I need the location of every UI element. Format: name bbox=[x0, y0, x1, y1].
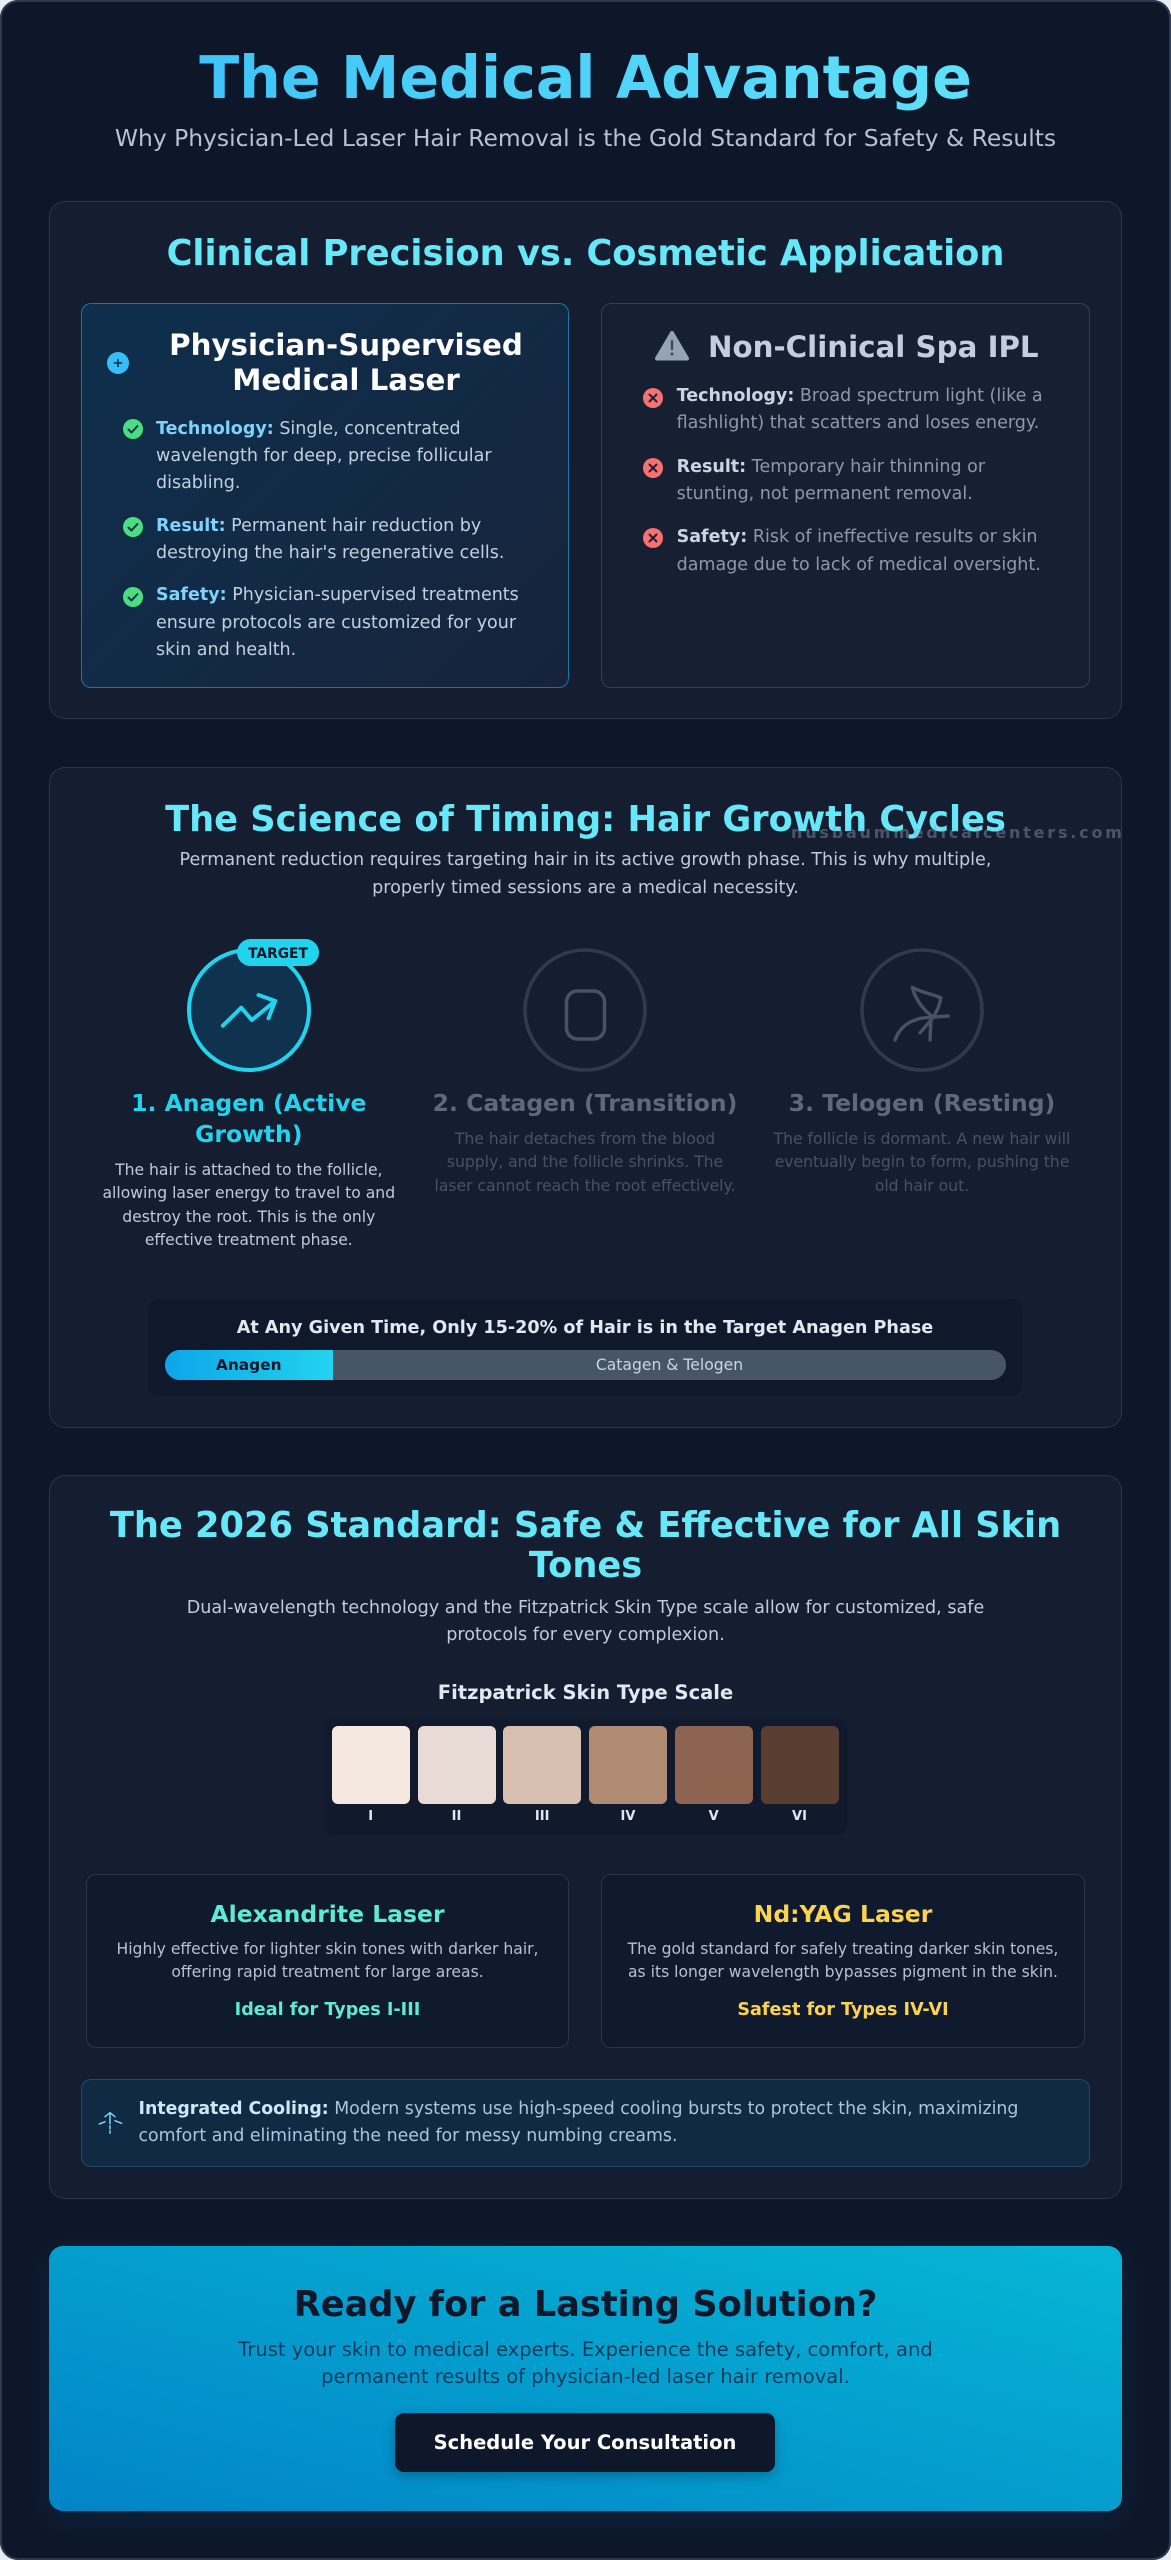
text: technology: Technology: Single, concentrated bbox=[156, 418, 461, 438]
nd:yag description: as its longer wavelength bypasses pigment in the skin. bbox=[628, 1963, 1058, 1981]
card: nd:yag laser bbox=[601, 1874, 1085, 2048]
text: safety bbox=[677, 527, 1041, 574]
icon: check result bbox=[123, 517, 143, 537]
intro text: Permanent reduction requires targeting hair in its active growth phase. This is why multiple, bbox=[180, 850, 991, 870]
subtitle: Why Physician-Led Laser Hair Removal is the Gold Standard for Safety & Results bbox=[115, 124, 1056, 152]
fitzpatrick scale swatches: III bbox=[535, 1809, 549, 1824]
text: technology bbox=[156, 418, 492, 493]
icon: cross safety bbox=[643, 528, 663, 548]
watermark: nusbaummedicalcenters.com bbox=[791, 823, 1125, 842]
heading: physician-supervised: Medical Laser bbox=[232, 363, 460, 397]
intro text: protocols for every complexion. bbox=[446, 1625, 725, 1645]
text: anagen description: The hair is attached to the follicle, bbox=[115, 1161, 382, 1179]
fitzpatrick scale swatches: I bbox=[368, 1809, 373, 1824]
alexandrite description: Highly effective for lighter skin tones with darker hair, bbox=[116, 1940, 539, 1958]
heading: clinical precision: Clinical Precision vs. Cosmetic Application bbox=[167, 232, 1004, 274]
fitzpatrick scale swatches: VI bbox=[792, 1809, 807, 1824]
fitzpatrick scale swatches bbox=[323, 1718, 847, 1835]
text: anagen description: allowing laser energy to travel to and bbox=[102, 1184, 395, 1202]
text: catagen title: 2. Catagen (Transition) bbox=[433, 1088, 737, 1116]
stat title: At Any Given Time, Only 15-20% of Hair is in the Target Anagen Phase bbox=[237, 1318, 933, 1338]
heading: fitzpatrick scale: Fitzpatrick Skin Type Scale bbox=[438, 1681, 733, 1704]
text: telogen description: old hair out. bbox=[875, 1177, 969, 1195]
text: cta: permanent results of physician-led laser hair removal. bbox=[321, 2365, 850, 2388]
target badge: TARGET bbox=[248, 946, 308, 962]
icon: catagen circle bbox=[523, 948, 647, 1072]
text: telogen description: The follicle is dormant. A new hair will bbox=[774, 1130, 1070, 1148]
text: integrated cooling: comfort and eliminating the need for messy numbing creams. bbox=[138, 2126, 677, 2146]
target badge bbox=[237, 939, 319, 966]
alexandrite description: offering rapid treatment for large areas. bbox=[171, 1963, 484, 1981]
callout: integrated cooling bbox=[81, 2079, 1090, 2167]
button: schedule bbox=[395, 2413, 775, 2472]
heading: 2026 standard bbox=[110, 1505, 1061, 1586]
nd:yag title: Nd:YAG Laser bbox=[754, 1900, 932, 1928]
text: technology bbox=[676, 386, 1043, 433]
icon: anagen circle bbox=[187, 949, 311, 1072]
stat bar box bbox=[148, 1299, 1022, 1396]
icon: check safety bbox=[123, 587, 143, 607]
text: telogen title: 3. Telogen (Resting) bbox=[789, 1088, 1055, 1116]
heading: non-clinical spa ipl: Non-Clinical Spa IPL bbox=[708, 330, 1039, 364]
icon: cooling bbox=[98, 2112, 122, 2134]
call to action panel bbox=[49, 2246, 1122, 2511]
text: anagen description: effective treatment phase. bbox=[145, 1231, 353, 1249]
text: anagen description bbox=[102, 1161, 395, 1249]
text: telogen description: eventually begin to form, pushing the bbox=[775, 1153, 1069, 1171]
alexandrite ideal types: Ideal for Types I-III bbox=[235, 2000, 420, 2020]
text: anagen title bbox=[131, 1088, 366, 1148]
heading: ready for a lasting solution: Ready for a Lasting Solution? bbox=[294, 2284, 877, 2324]
text: cta bbox=[238, 2338, 933, 2388]
text: safety: ensure protocols are customized for your bbox=[156, 613, 516, 633]
text: safety: Safety: Risk of ineffective results or skin bbox=[677, 527, 1038, 547]
text: telogen description bbox=[774, 1130, 1070, 1195]
heading: 2026 standard: The 2026 Standard: Safe & Effective for All Skin bbox=[110, 1505, 1061, 1546]
text: integrated cooling: Integrated Cooling: Modern systems use high-speed cooling bursts to protect the skin, maximizing bbox=[138, 2098, 1018, 2118]
heading: physician-supervised bbox=[169, 328, 523, 397]
fitzpatrick scale swatches: II bbox=[452, 1809, 461, 1824]
intro text: Dual-wavelength technology and the Fitzpatrick Skin Type scale allow for customized, safe bbox=[187, 1598, 984, 1618]
text: technology: wavelength for deep, precise follicular bbox=[156, 446, 492, 466]
text: safety bbox=[156, 585, 519, 660]
bar segment: catagen and telogen: Catagen & Telogen bbox=[596, 1356, 743, 1374]
text: safety: damage due to lack of medical oversight. bbox=[677, 554, 1041, 574]
heading: science of timing: The Science of Timing: Hair Growth Cycles bbox=[165, 798, 1006, 840]
text: catagen description: The hair detaches from the blood bbox=[455, 1130, 715, 1148]
text: anagen description: destroy the root. This is the only bbox=[122, 1208, 375, 1226]
bar segment: anagen: Anagen bbox=[216, 1356, 282, 1374]
icon: warning bbox=[655, 330, 690, 360]
heading: physician-supervised: Physician-Supervised bbox=[169, 328, 523, 362]
text: result: Result: Permanent hair reduction by bbox=[156, 516, 481, 536]
text: anagen title: Growth) bbox=[195, 1120, 303, 1148]
fitzpatrick scale swatches: IV bbox=[621, 1809, 635, 1824]
intro text bbox=[187, 1598, 984, 1645]
icon: cross technology bbox=[643, 388, 663, 408]
text: result: destroying the hair's regenerative cells. bbox=[156, 543, 504, 563]
text: result: stunting, not permanent removal. bbox=[677, 484, 973, 504]
text: catagen description: supply, and the follicle shrinks. The bbox=[447, 1153, 723, 1171]
text: safety: Safety: Physician-supervised treatments bbox=[156, 585, 519, 605]
text: technology: disabling. bbox=[156, 473, 240, 493]
nd:yag description: The gold standard for safely treating darker skin tones, bbox=[628, 1940, 1058, 1958]
alexandrite description bbox=[116, 1940, 539, 1981]
text: technology: flashlight) that scatters and loses energy. bbox=[677, 413, 1039, 433]
alexandrite title: Alexandrite Laser bbox=[210, 1900, 445, 1928]
title: The Medical Advantage bbox=[199, 44, 972, 112]
panel: clinical precision vs cosmetic application bbox=[49, 201, 1122, 719]
heading: 2026 standard: Tones bbox=[529, 1545, 642, 1586]
text: result: Result: Temporary hair thinning or bbox=[677, 457, 985, 477]
text: anagen title: 1. Anagen (Active bbox=[131, 1088, 366, 1116]
panel: science of timing bbox=[49, 767, 1122, 1428]
nd:yag safest types: Safest for Types IV-VI bbox=[737, 2000, 949, 2020]
text: catagen description bbox=[435, 1130, 735, 1195]
text: integrated cooling bbox=[138, 2098, 1018, 2146]
nd:yag description bbox=[628, 1940, 1058, 1981]
progress bar bbox=[164, 1350, 1006, 1380]
intro text: properly timed sessions are a medical necessity. bbox=[372, 878, 799, 898]
card: physician-supervised medical laser bbox=[81, 303, 569, 688]
text: technology: Technology: Broad spectrum light (like a bbox=[677, 386, 1043, 406]
text: cta: Trust your skin to medical experts. Experience the safety, comfort, and bbox=[238, 2338, 933, 2361]
bar segment: anagen bbox=[164, 1350, 333, 1380]
text: catagen description: laser cannot reach the root effectively. bbox=[435, 1177, 735, 1195]
panel: 2026 standard bbox=[49, 1475, 1122, 2199]
intro text bbox=[180, 850, 991, 898]
icon: telogen circle bbox=[860, 948, 984, 1072]
title bbox=[0, 41, 1171, 115]
icon: cross result bbox=[643, 458, 663, 478]
card: alexandrite laser bbox=[86, 1874, 569, 2048]
fitzpatrick scale swatches: V bbox=[709, 1809, 719, 1824]
button: schedule: Schedule Your Consultation bbox=[434, 2431, 736, 2454]
card: non-clinical spa ipl bbox=[601, 303, 1090, 688]
text: result bbox=[156, 516, 504, 563]
icon: check technology bbox=[123, 419, 143, 439]
icon: plus bbox=[107, 352, 129, 374]
text: safety: skin and health. bbox=[156, 640, 296, 660]
text: result bbox=[677, 457, 986, 504]
